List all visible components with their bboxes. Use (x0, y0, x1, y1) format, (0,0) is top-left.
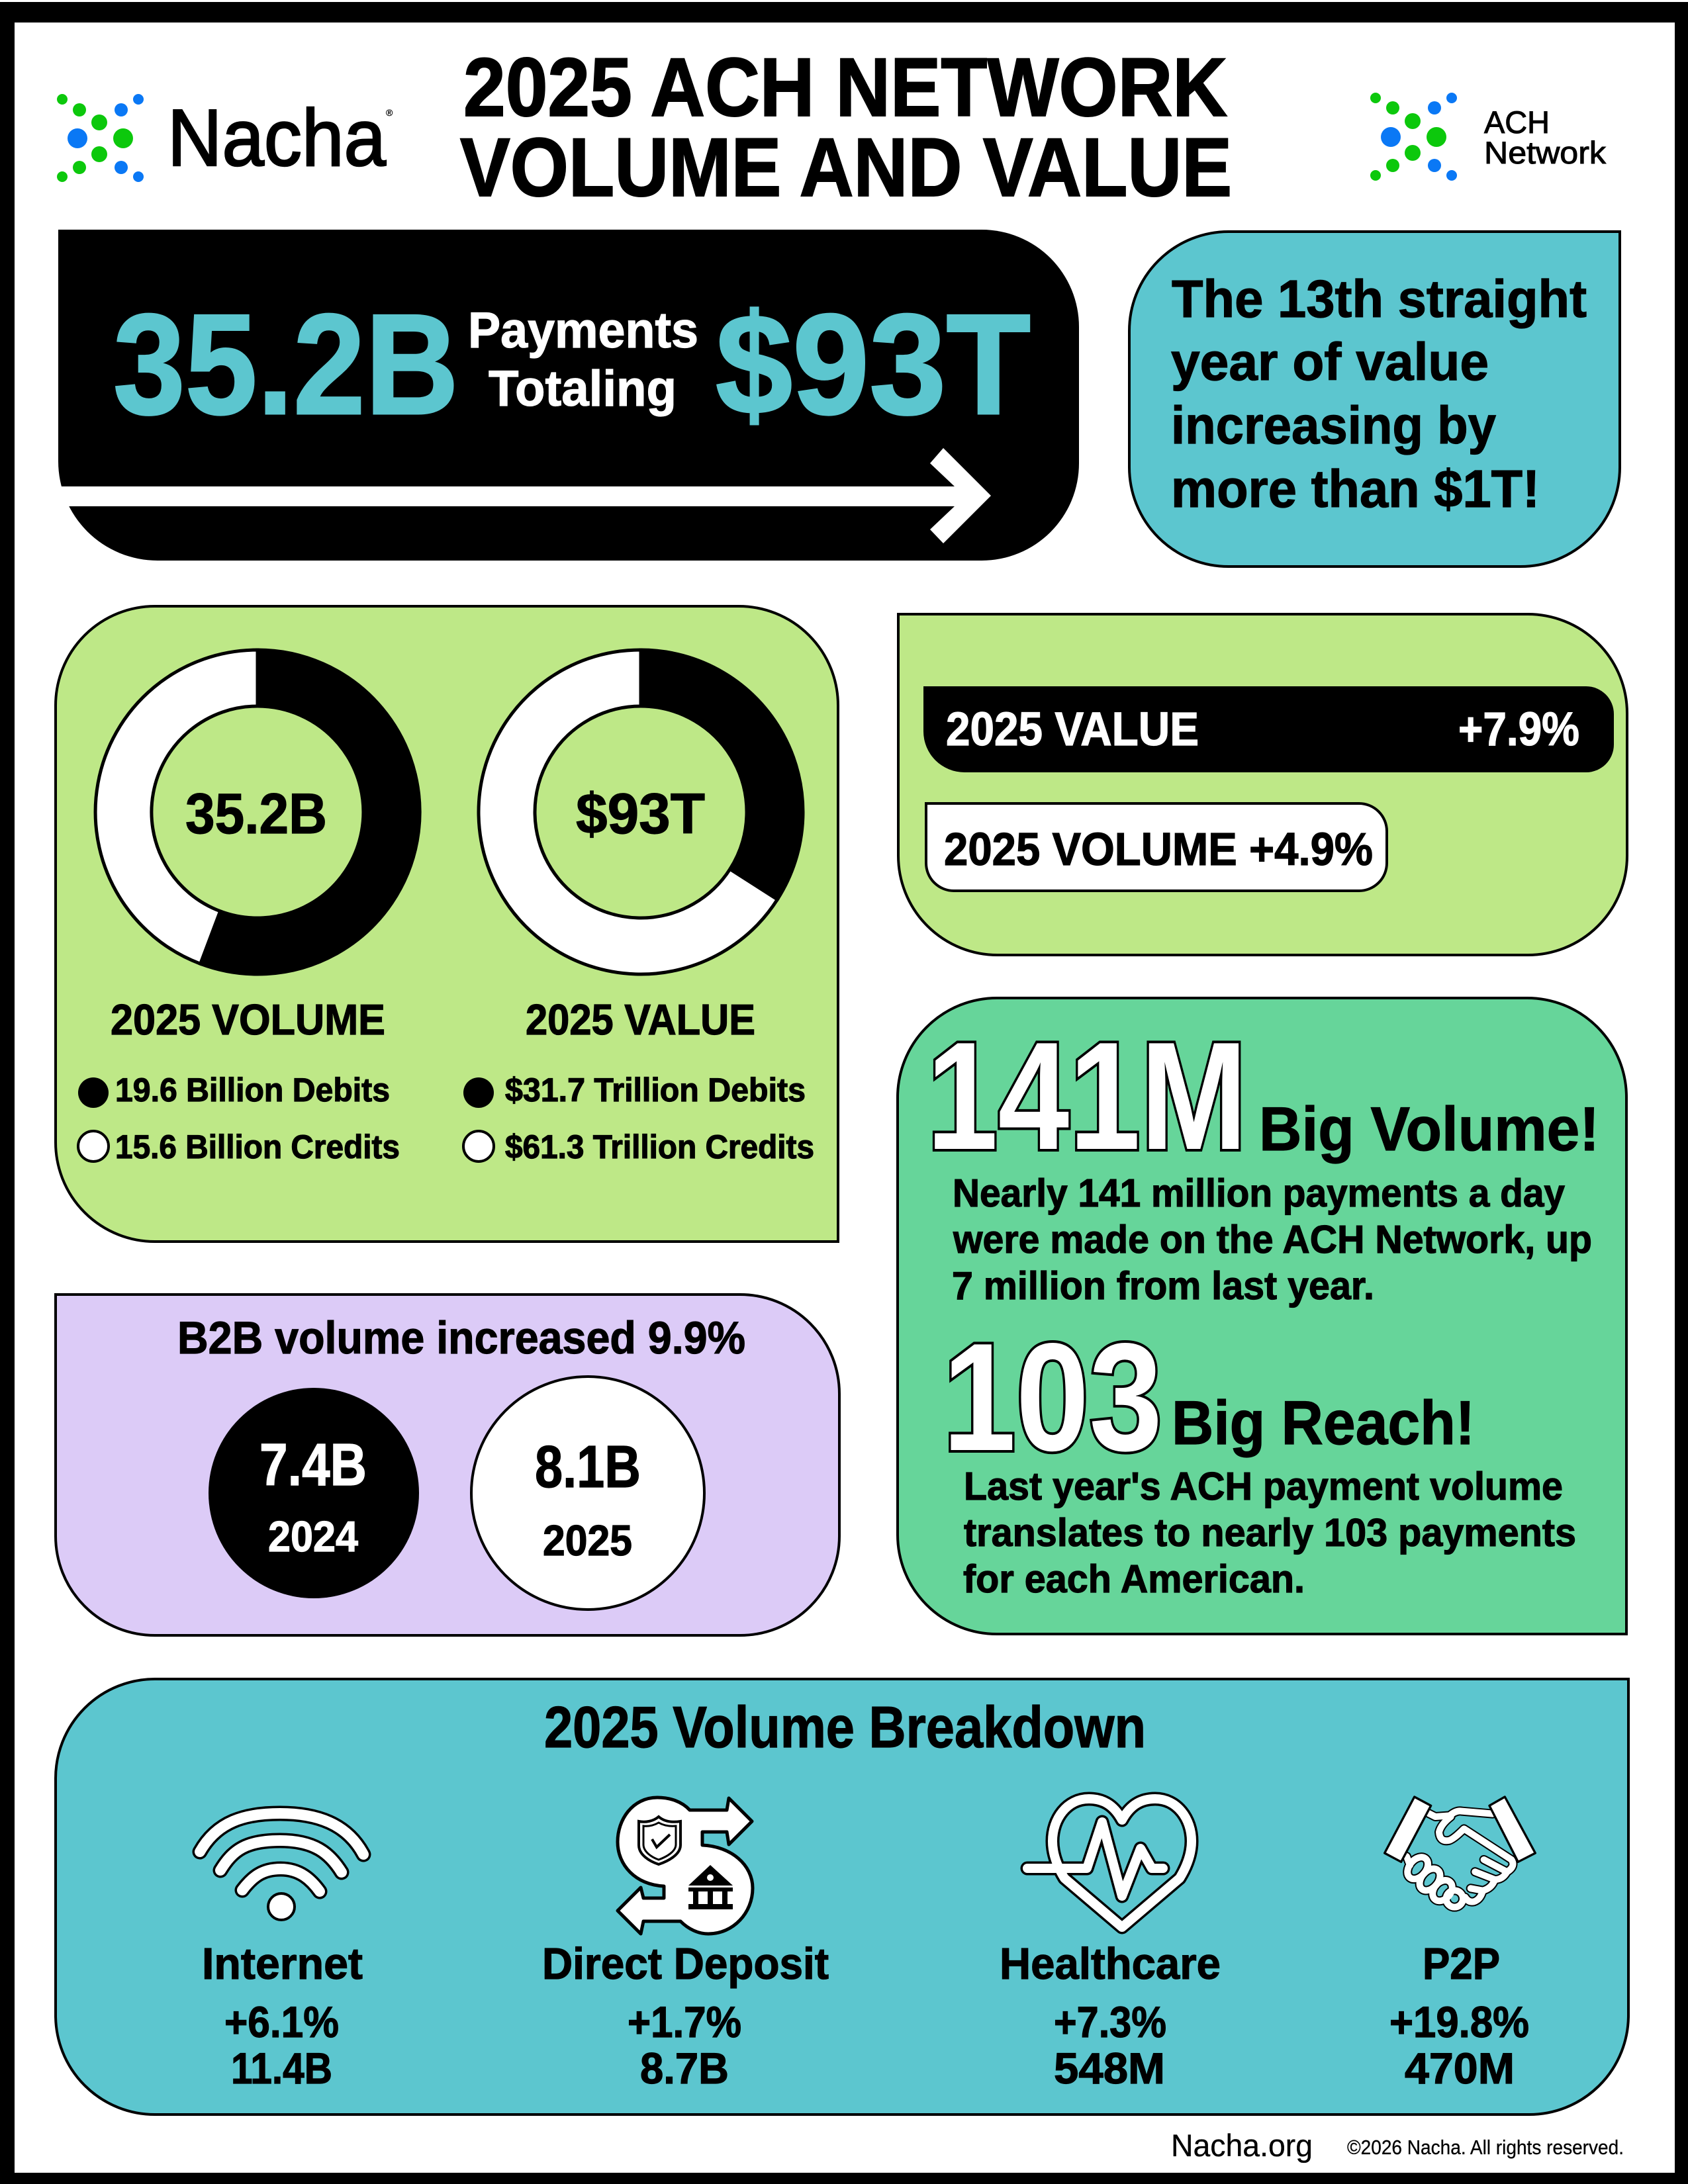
panel background (56, 1679, 1628, 2115)
callout background (1129, 232, 1620, 567)
title line 2: VOLUME AND VALUE (460, 122, 1232, 214)
text: big volume description: were made on the ACH Network, up (953, 1218, 1592, 1261)
text: big reach description: translates to nearly 103 payments (964, 1511, 1576, 1555)
panel: B2B volume (56, 1295, 839, 1635)
stat: 141M: 141M (927, 1011, 1247, 1182)
legend: value (463, 1071, 814, 1165)
text: big reach description: Last year's ACH payment volume (964, 1465, 1563, 1508)
stat: $93T: $93T (716, 284, 1031, 444)
heading: 2025 volume breakdown: 2025 Volume Breakdown (544, 1694, 1146, 1760)
circle: 2025: 2025 (543, 1516, 632, 1565)
circle: 2024: 7.4B (259, 1432, 367, 1498)
icon: Nacha dots (57, 94, 144, 182)
panel background (56, 606, 838, 1242)
panel: 13th straight year callout (1129, 232, 1620, 567)
callout text: The 13th straight (1172, 269, 1587, 328)
circle: 2024: 2024 (268, 1512, 358, 1561)
logo: Nacha (57, 93, 393, 183)
callout text (1171, 269, 1587, 518)
circle: 2025 (471, 1377, 704, 1610)
text: big reach description (963, 1465, 1576, 1601)
legend: value: $61.3 Trillion Credits (505, 1128, 814, 1165)
title (460, 42, 1232, 214)
heading: 2025 volume: 2025 VOLUME (111, 995, 385, 1044)
category: Internet (200, 1813, 363, 2093)
panel background (56, 1295, 839, 1635)
bar: 2025 value (923, 686, 1614, 772)
stat: 103: 103 (943, 1312, 1162, 1483)
label: Healthcare: Healthcare (1000, 1939, 1221, 1989)
circle: 2025: 8.1B (535, 1434, 641, 1500)
donut chart: volume (95, 650, 420, 974)
label: Totaling: Totaling (489, 361, 677, 417)
panel background (898, 614, 1627, 955)
icon: ACH Network dots (1370, 93, 1457, 181)
text: big volume description: Nearly 141 million payments a day (953, 1171, 1565, 1215)
title line 1: 2025 ACH NETWORK (463, 42, 1227, 134)
value: 470M: 470M (1405, 2044, 1515, 2093)
text: big volume description (952, 1171, 1592, 1308)
stat: 103: 103 (943, 1312, 1162, 1483)
label: Internet: Internet (202, 1939, 363, 1989)
panel: volume breakdown (56, 1679, 1628, 2115)
callout text: more than $1T! (1171, 459, 1540, 518)
label: Direct Deposit: Direct Deposit (542, 1939, 829, 1989)
wordmark: Nacha: Nacha (167, 93, 386, 183)
change: +19.8%: +19.8% (1389, 1997, 1529, 2046)
registered mark: ® (386, 107, 393, 118)
text: big reach description: for each American. (963, 1557, 1305, 1601)
heading: Big Reach!: Big Reach! (1172, 1388, 1475, 1457)
bar: 2025 volume: 2025 VOLUME +4.9% (944, 823, 1373, 875)
legend: volume (78, 1071, 400, 1165)
circle: 2024 (209, 1388, 419, 1598)
bar: 2025 value: 2025 VALUE (946, 704, 1199, 756)
text: big volume description: 7 million from last year. (952, 1264, 1374, 1308)
change: +7.3%: +7.3% (1054, 1997, 1166, 2046)
panel: headline totals (58, 230, 1079, 561)
panel: big volume and big reach (898, 998, 1626, 1634)
icon: wifi (200, 1813, 363, 1920)
value: 548M: 548M (1054, 2044, 1165, 2093)
heading: Big Volume!: Big Volume! (1259, 1094, 1599, 1163)
icon: direct deposit arrows (618, 1797, 753, 1934)
footer: copyright: ©2026 Nacha. All rights reserved. (1347, 2136, 1624, 2159)
bar: 2025 volume (926, 803, 1387, 891)
legend: volume: 15.6 Billion Credits (115, 1128, 400, 1165)
change: +6.1%: +6.1% (224, 1997, 339, 2046)
change: +1.7%: +1.7% (628, 1997, 741, 2046)
heading: 2025 value: 2025 VALUE (526, 995, 755, 1044)
icon: handshake (1385, 1797, 1535, 1907)
arrow (58, 448, 991, 543)
label: P2P: P2P (1423, 1939, 1500, 1989)
icon: shield (639, 1817, 680, 1864)
category: Direct Deposit (542, 1797, 829, 2093)
logo: ACH Network (1370, 93, 1607, 181)
wordmark: ACH: ACH (1484, 105, 1550, 140)
panel: volume and value donuts (56, 606, 838, 1242)
donut center: $93T: $93T (576, 782, 705, 846)
donut chart: value (479, 650, 803, 974)
category: Healthcare (1000, 1799, 1221, 2093)
legend: volume: 19.6 Billion Debits (115, 1071, 390, 1109)
icon: heart with pulse (1027, 1799, 1192, 1927)
stat: 35.2B: 35.2B (113, 284, 459, 444)
callout text: increasing by (1171, 396, 1496, 455)
wordmark: Network: Network (1484, 135, 1607, 170)
icon: bank (688, 1865, 733, 1909)
panel background (898, 998, 1626, 1634)
bar: 2025 value: +7.9% (1458, 704, 1579, 756)
label: Payments: Payments (468, 302, 698, 359)
hero background (58, 230, 1079, 561)
callout text: year of value (1171, 332, 1489, 391)
heading: B2B volume: B2B volume increased 9.9% (177, 1312, 745, 1363)
value: 11.4B: 11.4B (231, 2044, 332, 2093)
value: 8.7B: 8.7B (640, 2044, 729, 2093)
panel: growth bars (898, 614, 1627, 955)
stat: 141M: 141M (927, 1011, 1247, 1182)
legend: value: $31.7 Trillion Debits (505, 1071, 806, 1109)
donut center: 35.2B: 35.2B (185, 782, 327, 846)
category: P2P (1385, 1797, 1535, 2093)
footer: website: Nacha.org (1171, 2128, 1313, 2163)
